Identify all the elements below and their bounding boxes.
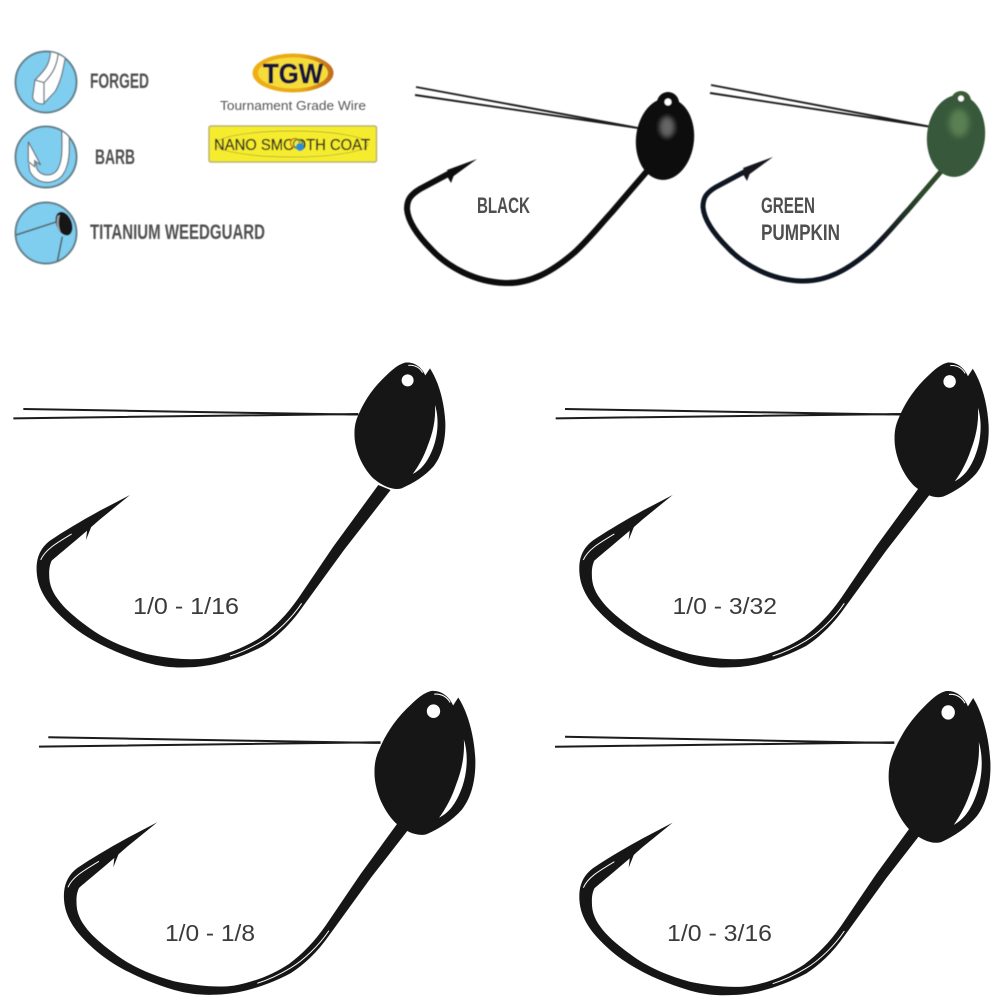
hook body <box>703 157 944 281</box>
icon: titanium weedguard <box>15 202 76 264</box>
icon: barb <box>16 126 76 188</box>
logo: nano smooth coat <box>209 126 376 162</box>
hook: size 1/0 - 3/32 <box>556 363 989 668</box>
label: green pumpkin: PUMPKIN <box>761 220 840 245</box>
feature list: forged, barb, titanium weedguard <box>15 50 265 264</box>
logo: TGW tournament grade wire <box>220 54 366 113</box>
hook: size 1/0 - 3/16 <box>555 691 990 995</box>
icon: forged <box>16 50 76 112</box>
hook: size 1/0 - 1/16 <box>13 362 445 668</box>
hook: size 1/0 - 1/8 <box>39 691 475 995</box>
hook: black colour <box>407 87 698 283</box>
logo: TGW tournament grade wire: TGW <box>263 58 324 89</box>
size label: 1/0 - 1/16 <box>133 593 239 619</box>
label: titanium weedguard: TITANIUM WEEDGUARD <box>90 221 265 244</box>
label: green pumpkin: GREEN <box>761 193 815 218</box>
size label: 1/0 - 3/16 <box>667 920 772 946</box>
hook body <box>407 159 648 283</box>
label: black: BLACK <box>477 193 530 218</box>
weedguard wires <box>710 85 932 127</box>
head <box>923 91 989 180</box>
logo: nano smooth coat: NANO SMOOTH COAT <box>214 137 370 154</box>
label: forged: FORGED <box>90 70 149 93</box>
label: green pumpkin <box>761 193 840 245</box>
hook: green pumpkin colour <box>703 85 989 281</box>
head <box>632 92 698 183</box>
logo: TGW tournament grade wire: Tournament Grade Wire <box>220 99 366 113</box>
label: barb: BARB <box>95 146 135 169</box>
size label: 1/0 - 1/8 <box>165 920 255 946</box>
weedguard wires <box>415 87 638 128</box>
size label: 1/0 - 3/32 <box>672 593 777 619</box>
